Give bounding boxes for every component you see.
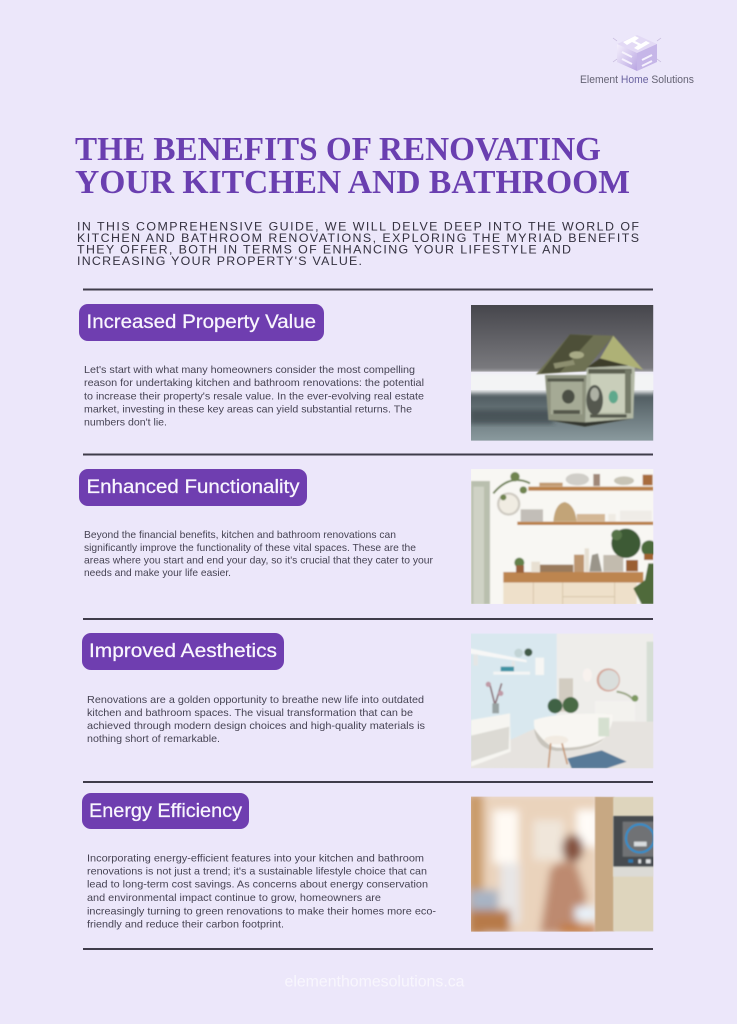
title: YOUR KITCHEN AND BATHROOM <box>75 164 630 201</box>
body text: Renovations are a golden opportunity to breathe new life into outdated <box>87 694 424 706</box>
body text <box>87 694 425 745</box>
body text: numbers don't lie. <box>84 416 167 428</box>
body text: renovations is not just a trend; it's a sustainable lifestyle choice that can <box>87 866 427 878</box>
heading pill <box>82 793 249 829</box>
body text: areas where you start and end your day, so it's crucial that they cater to your <box>84 554 433 566</box>
icon: isometric house cube <box>613 35 661 71</box>
body text: Let's start with what many homeowners consider the most compelling <box>84 364 415 376</box>
body text: Beyond the financial benefits, kitchen and bathroom renovations can <box>84 529 396 541</box>
heading pill <box>82 633 284 670</box>
body text: market, investing in these key areas can yield substantial returns. The <box>84 404 412 416</box>
body text: increasingly turning to green renovations to make their homes more eco- <box>87 906 437 918</box>
logo wordmark: Element Home Solutions <box>580 74 694 86</box>
photo: dollar bill house <box>467 305 657 442</box>
heading pill <box>79 304 324 341</box>
body text: and environmental impact continue to grow, homeowners are <box>87 892 381 904</box>
body text: nothing short of remarkable. <box>87 733 220 745</box>
body text: achieved through modern design choices and high-quality materials is <box>87 720 425 732</box>
title <box>75 131 630 201</box>
intro text: THEY OFFER, BOTH IN TERMS OF ENHANCING YOUR LIFESTYLE AND <box>77 242 571 256</box>
footer website: elementhomesolutions.ca <box>284 974 465 990</box>
body text: Incorporating energy-efficient features into your kitchen and bathroom <box>87 852 424 864</box>
body text: reason for undertaking kitchen and bathroom renovations: the potential <box>84 377 424 389</box>
title: THE BENEFITS OF RENOVATING <box>75 131 601 168</box>
body text <box>84 529 433 579</box>
body text: kitchen and bathroom spaces. The visual transformation that can be <box>87 707 413 719</box>
body text: lead to long-term cost savings. As concerns about energy conservation <box>87 878 428 890</box>
photo: white bathroom <box>470 633 654 769</box>
heading pill: Enhanced Functionality <box>86 477 300 498</box>
logo: Element Home Solutions <box>580 35 694 86</box>
heading pill <box>79 469 307 506</box>
body text: friendly and reduce their carbon footprint. <box>87 918 284 930</box>
intro text: KITCHEN AND BATHROOM RENOVATIONS, EXPLORING THE MYRIAD BENEFITS <box>77 231 639 245</box>
intro text: INCREASING YOUR PROPERTY'S VALUE. <box>77 254 362 268</box>
intro text: IN THIS COMPREHENSIVE GUIDE, WE WILL DELVE DEEP INTO THE WORLD OF <box>77 220 639 234</box>
body text: needs and make your life easier. <box>84 567 231 579</box>
heading pill: Energy Efficiency <box>89 801 243 822</box>
panel: Improved Aesthetics <box>82 633 654 769</box>
photo: kitchen shelves <box>470 468 657 605</box>
photo: blurred room with smart thermostat <box>467 793 654 937</box>
body text <box>84 364 424 428</box>
heading pill: Improved Aesthetics <box>89 641 277 662</box>
body text <box>87 852 437 930</box>
panel: Energy Efficiency <box>82 793 654 937</box>
intro text <box>77 220 639 268</box>
body text: significantly improve the functionality of these vital spaces. These are the <box>84 542 416 554</box>
panel: Enhanced Functionality <box>79 468 657 605</box>
body text: to increase their property's resale value. In the ever-evolving real estate <box>84 390 424 402</box>
panel: Increased Property Value <box>79 304 657 442</box>
heading pill: Increased Property Value <box>86 312 316 333</box>
